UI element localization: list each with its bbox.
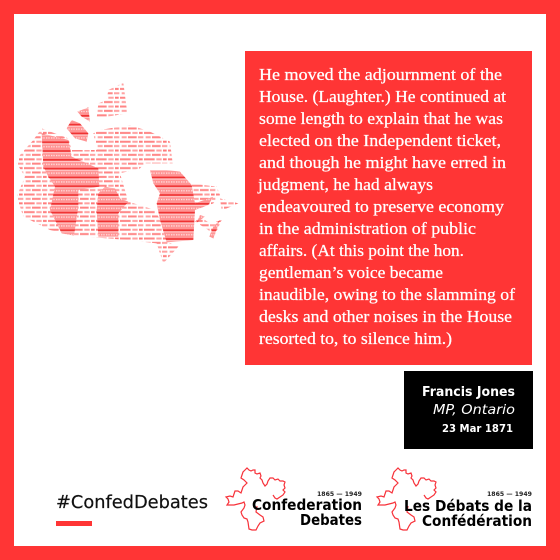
quote text: in the administration of public (259, 219, 476, 238)
English logo name: Confederation (252, 496, 362, 514)
quote text: endeavoured to preserve economy (259, 197, 505, 216)
icon: maple leaf (226, 468, 285, 530)
hashtag underline (56, 521, 92, 526)
quote text: inaudible, owing to the slamming of (259, 285, 516, 304)
quote text: some length to explain that he was (259, 109, 503, 128)
icon: maple leaf (377, 468, 436, 530)
quote text: judgment, he had always (257, 175, 433, 194)
quote text: gentleman’s voice became (259, 263, 443, 282)
quote text: affairs. (At this point the hon. (259, 241, 464, 260)
French logo dates: 1865 — 1949 (487, 490, 532, 498)
quote text: elected on the Independent ticket, (259, 131, 501, 150)
map: dark regions (42, 107, 220, 242)
English logo: Debates (300, 511, 362, 529)
attribution box (404, 371, 533, 449)
map: outer territory (17, 83, 238, 263)
speaker name: Francis Jones (422, 385, 515, 400)
quote panel (245, 51, 532, 365)
quote text (257, 65, 516, 348)
French logo (377, 468, 532, 530)
date: 23 Mar 1871 (442, 422, 513, 435)
quote text: and though he might have erred in (259, 153, 506, 172)
hashtag: #ConfedDebates (56, 493, 208, 513)
French logo name: Les Débats de la (404, 497, 532, 515)
quote text: House. (Laughter.) He continued at (259, 87, 506, 106)
quote text: He moved the adjournment of the (259, 65, 502, 84)
English logo dates: 1865 — 1949 (317, 490, 362, 498)
quote text: desks and other noises in the House (259, 307, 512, 326)
map of Canada (17, 83, 238, 263)
English logo (226, 468, 362, 530)
speaker role: MP, Ontario (433, 403, 515, 418)
quote text: resorted to, to silence him.) (259, 329, 452, 348)
French logo: Confédération (422, 512, 532, 530)
